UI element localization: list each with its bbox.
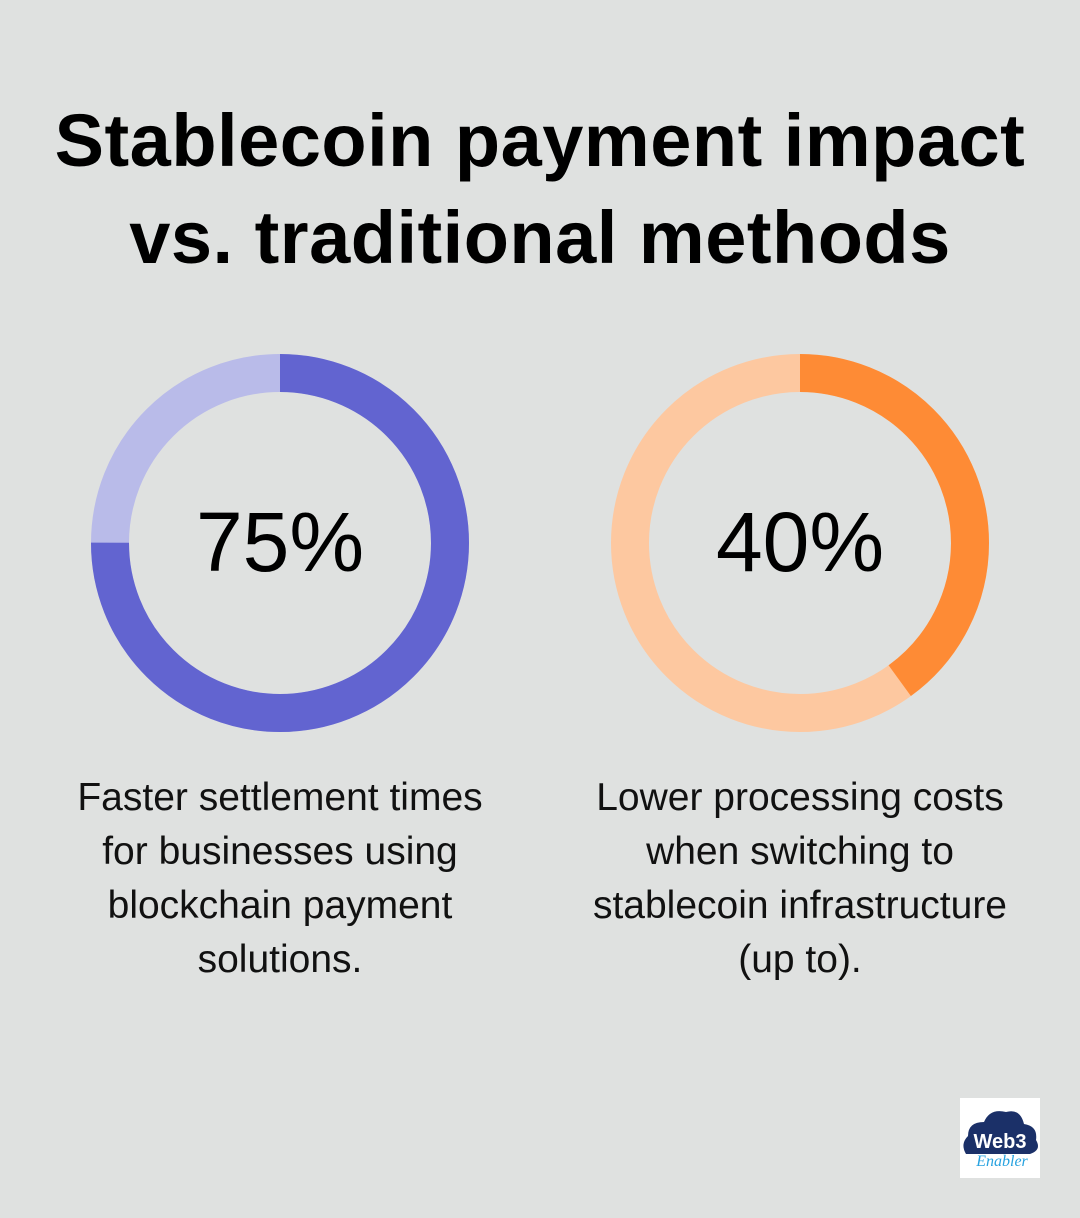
title: Stablecoin payment impact [55,99,1025,182]
text: description 2: Lower processing costs [596,776,1004,819]
text: description 1: Faster settlement times [77,776,483,819]
chart: donut 75% [91,354,989,732]
text: description 1: solutions. [198,938,362,981]
icon: logo [960,1098,1040,1178]
title: vs. traditional methods [129,196,951,279]
chart: donut 40%: 40% [716,495,884,589]
text: description 1: for businesses using [102,830,458,873]
icon: logo: Web3 [974,1131,1026,1153]
text: description 2: when switching to [646,830,954,873]
text: description 2: (up to). [738,938,862,981]
text: description 1: blockchain payment [108,884,452,927]
chart: donut 40% [630,373,970,713]
text: description 2: stablecoin infrastructure [593,884,1007,927]
icon: logo: Enabler [975,1153,1029,1170]
text: description 2 [593,776,1007,981]
text: description 1 [77,776,483,981]
title [55,99,1025,279]
chart: donut 75%: 75% [196,495,364,589]
